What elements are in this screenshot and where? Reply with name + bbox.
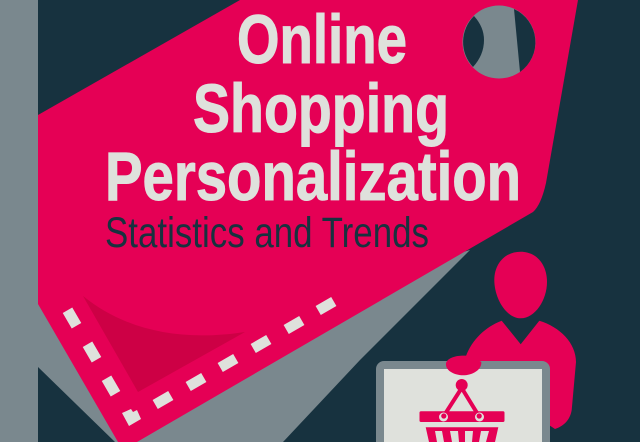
title: [105, 1, 521, 215]
hand: [446, 356, 481, 375]
gray tag shadow: [38, 250, 470, 442]
title: Online: [237, 1, 407, 78]
tag hole: [462, 6, 536, 78]
stitching dashes: [63, 297, 336, 426]
title: Personalization: [105, 138, 521, 215]
shopping basket icon: [420, 379, 504, 442]
subtitle: Statistics and Trends: [105, 209, 429, 257]
title: Shopping: [193, 70, 449, 147]
tag fold: [83, 296, 245, 392]
person icon: [466, 252, 576, 429]
laptop: [376, 361, 550, 442]
